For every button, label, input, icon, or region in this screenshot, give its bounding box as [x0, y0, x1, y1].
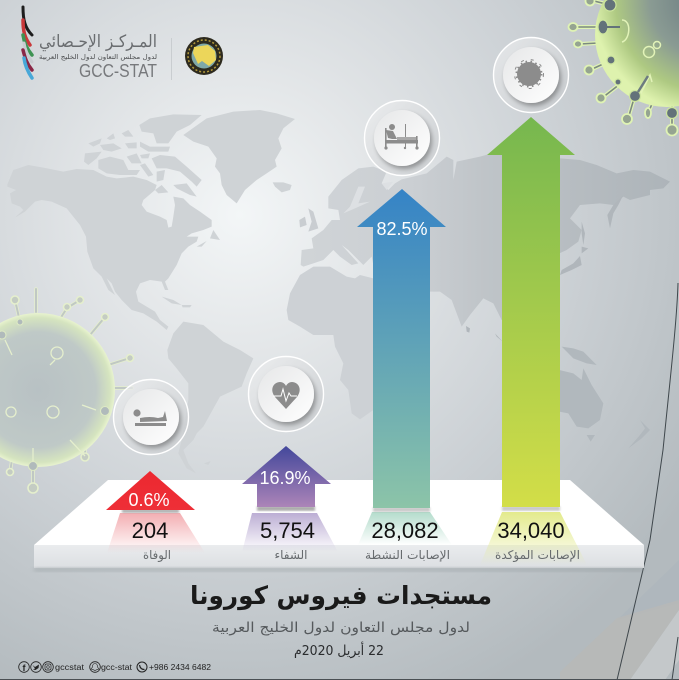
confirmed cases icon badge	[494, 38, 568, 112]
icon: facebook	[19, 662, 29, 673]
recoveries arrow	[242, 446, 331, 507]
logo Arabic subtitle: لدول مجلس التعاون لدول الخليج العربية	[39, 53, 157, 61]
recoveries label: الشفاء	[274, 548, 308, 562]
logo ribbon	[23, 7, 32, 78]
deaths icon badge	[114, 380, 188, 454]
footer phone number: +986 2434 6482	[149, 662, 211, 672]
GCC emblem	[185, 37, 223, 75]
map: Baltic and White seas	[343, 182, 393, 213]
platform	[34, 480, 644, 572]
deaths light beam	[107, 513, 205, 553]
logo GCC-STAT text: GCC-STAT	[79, 61, 157, 81]
map: North America	[7, 165, 212, 330]
icon: hospital bed	[384, 124, 419, 150]
date: 22 أبريل 2020م	[294, 641, 384, 659]
confirmed cases arrow shadow	[502, 506, 560, 511]
map: South America	[167, 322, 253, 473]
icon: twitter	[31, 662, 41, 672]
map: Oceania	[559, 347, 650, 448]
active cases label: الإصابات النشطة	[365, 548, 450, 562]
virus left	[0, 289, 134, 493]
map: Eurasia	[301, 150, 670, 327]
virus top right	[568, 0, 679, 136]
map: Arctic islands	[84, 114, 202, 197]
active cases light beam	[358, 512, 452, 545]
deaths arrow shadow	[122, 509, 179, 513]
recoveries icon badge	[248, 356, 324, 432]
deaths percentage: 0.6%	[128, 490, 170, 510]
map: Americas west group	[7, 110, 295, 330]
active cases value: 28,082	[371, 518, 439, 543]
icon: snapchat	[90, 662, 100, 672]
active cases arrow shadow	[373, 507, 430, 512]
deaths arrow	[106, 471, 195, 510]
confirmed cases arrow	[487, 117, 575, 507]
icon: virus	[514, 60, 544, 88]
map: Japan, Kamchatka and Sakhalin	[466, 195, 623, 342]
footer handle: gccstat: gccstat	[55, 662, 85, 672]
world map	[7, 110, 670, 473]
subtitle: لدول مجلس التعاون لدول الخليج العربية	[212, 620, 470, 636]
map: Old World group	[287, 150, 670, 448]
icon: facebook: f	[22, 663, 26, 673]
metric: recoveries	[242, 356, 338, 562]
title: مستجدات فيروس كورونا	[190, 581, 492, 611]
icon: heart with pulse	[272, 382, 300, 409]
map: Africa	[287, 267, 430, 419]
map: Iceland	[273, 182, 292, 192]
recoveries percentage: 16.9%	[259, 468, 311, 488]
metric: confirmed cases	[480, 38, 587, 565]
recoveries arrow shadow	[257, 506, 315, 511]
logo: GCC-STAT	[23, 7, 223, 81]
confirmed cases value: 34,040	[497, 518, 565, 543]
bottom edge line	[0, 679, 679, 680]
icon: instagram	[43, 662, 53, 672]
map: Newfoundland and Caribbean	[162, 230, 220, 307]
metric: active cases	[357, 100, 452, 562]
right edge shard lines	[560, 283, 679, 680]
active cases arrow	[357, 189, 446, 508]
active cases icon badge	[364, 100, 440, 176]
recoveries light beam	[242, 513, 338, 552]
logo Arabic name: المـركـز الإحـصائي	[39, 32, 157, 52]
icon: person lying down	[133, 409, 167, 426]
icon: whatsapp	[137, 662, 147, 672]
active cases percentage: 82.5%	[376, 219, 428, 239]
confirmed cases light beam	[480, 512, 587, 565]
metric: deaths	[106, 380, 205, 563]
deaths value: 204	[132, 518, 168, 543]
deaths label: الوفاة	[143, 548, 171, 563]
confirmed cases label: الإصابات المؤكدة	[495, 548, 580, 563]
recoveries value: 5,754	[260, 518, 315, 543]
map: Greenland	[183, 110, 295, 203]
footer handle: gcc-stat: gcc-stat	[101, 662, 133, 672]
map: islands of Europe and Asia	[299, 208, 318, 232]
logo divider	[171, 38, 172, 80]
footer contacts	[19, 662, 211, 673]
